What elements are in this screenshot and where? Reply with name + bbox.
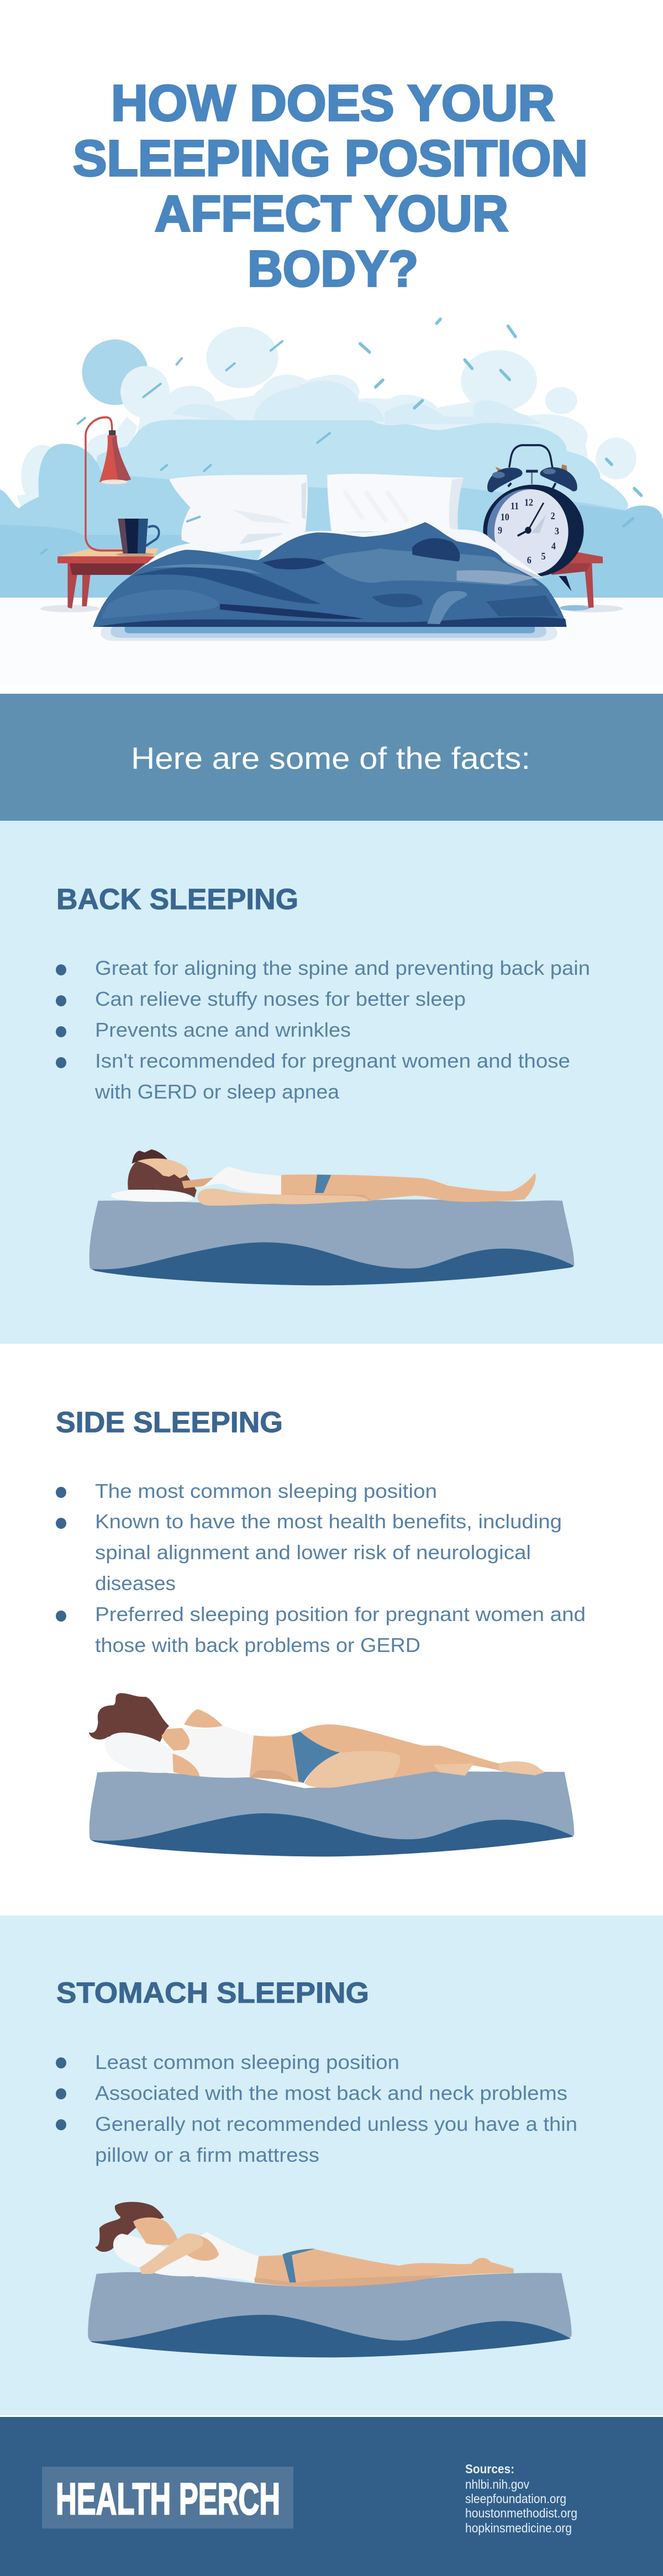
bullet list: back sleeping: [56, 957, 590, 1103]
bullet list: stomach sleeping: Least common sleeping position: [95, 2051, 399, 2073]
hero illustration: messy bed with lamp and alarm clock: [0, 319, 663, 685]
icon: right pillow: [327, 474, 464, 532]
logo: Health Perch: HEALTH PERCH: [56, 2474, 280, 2524]
title: AFFECT YOUR: [155, 186, 508, 242]
footer: [0, 2417, 663, 2576]
sources list: sleepfoundation.org: [465, 2491, 566, 2506]
icon: crumpled blanket and white sheet: [93, 522, 567, 627]
icon: bedside table left with shadow: [40, 548, 159, 613]
icon: alarm clock: 3: [555, 526, 559, 537]
heading: stomach sleeping: STOMACH SLEEPING: [56, 1977, 369, 2009]
icon: dark mug: [116, 519, 159, 556]
bullet list: stomach sleeping: Generally not recommended unless you have a thin: [95, 2113, 577, 2135]
bullet list: back sleeping: Great for aligning the spine and preventing back pain: [95, 957, 590, 979]
bullet list: side sleeping: The most common sleeping position: [95, 1480, 437, 1502]
sources list: houstonmethodist.org: [465, 2506, 577, 2520]
heading: side sleeping: SIDE SLEEPING: [56, 1406, 283, 1439]
icon: alarm clock: 2: [551, 510, 555, 521]
sources list: hopkinsmedicine.org: [465, 2521, 572, 2535]
bullet list: side sleeping: diseases: [95, 1572, 176, 1595]
sources list: [465, 2462, 577, 2535]
banner: here are some of the facts: Here are some of the facts:: [131, 741, 530, 775]
bullet list: back sleeping: Prevents acne and wrinkles: [95, 1018, 351, 1041]
icon: alarm clock: 6: [527, 555, 532, 566]
bullet list: side sleeping: spinal alignment and lower risk of neurological: [95, 1541, 531, 1564]
icon: alarm clock: 12: [524, 497, 533, 508]
icon: alarm clock: 4: [551, 541, 556, 552]
title: [73, 75, 588, 297]
icon: alarm clock: [483, 445, 584, 591]
bullet list: back sleeping: Isn't recommended for pregnant women and those: [95, 1049, 570, 1072]
icon: alarm clock: 5: [541, 551, 545, 562]
sources list: Sources:: [465, 2462, 514, 2476]
logo: Health Perch: [42, 2467, 293, 2529]
bullet list: side sleeping: [56, 1480, 586, 1656]
illustration: woman sleeping on her side on a mattress: [89, 1693, 574, 1856]
illustration: woman sleeping on her back on a mattress: [90, 1149, 574, 1285]
illustration: woman sleeping on her stomach on a mattress: [88, 2202, 572, 2357]
sources list: nhlbi.nih.gov: [465, 2477, 529, 2491]
panel: back sleeping: [0, 821, 663, 1344]
bullet list: side sleeping: Known to have the most health benefits, including: [95, 1510, 562, 1533]
icon: bedside table right with shadow: [551, 552, 623, 613]
icon: bed shadow: [101, 625, 557, 641]
bullet list: side sleeping: Preferred sleeping position for pregnant women and: [95, 1603, 586, 1625]
heading: back sleeping: BACK SLEEPING: [56, 883, 298, 916]
clouds background: [0, 326, 663, 598]
bullet list: stomach sleeping: pillow or a firm mattress: [95, 2144, 319, 2166]
bullet list: side sleeping: those with back problems or GERD: [95, 1634, 420, 1656]
icon: alarm clock: 11: [511, 500, 519, 511]
bullet list: back sleeping: Can relieve stuffy noses for better sleep: [95, 988, 466, 1010]
bullet list: back sleeping: with GERD or sleep apnea: [94, 1080, 340, 1103]
banner: here are some of the facts: [0, 694, 663, 821]
icon: alarm clock: 10: [501, 511, 509, 522]
icon: red desk lamp: [86, 418, 131, 551]
icon: alarm clock: 9: [498, 525, 502, 536]
title: BODY?: [248, 241, 418, 297]
bullet list: stomach sleeping: Associated with the most back and neck problems: [95, 2082, 567, 2104]
icon: left pillow: [169, 474, 308, 552]
panel: stomach sleeping: [0, 1915, 663, 2415]
title: HOW DOES YOUR: [111, 75, 555, 131]
bullet list: stomach sleeping: [56, 2051, 577, 2166]
panel: side sleeping: [0, 1344, 663, 1915]
title: SLEEPING POSITION: [73, 130, 588, 187]
icon: rain dashes: [41, 319, 641, 553]
